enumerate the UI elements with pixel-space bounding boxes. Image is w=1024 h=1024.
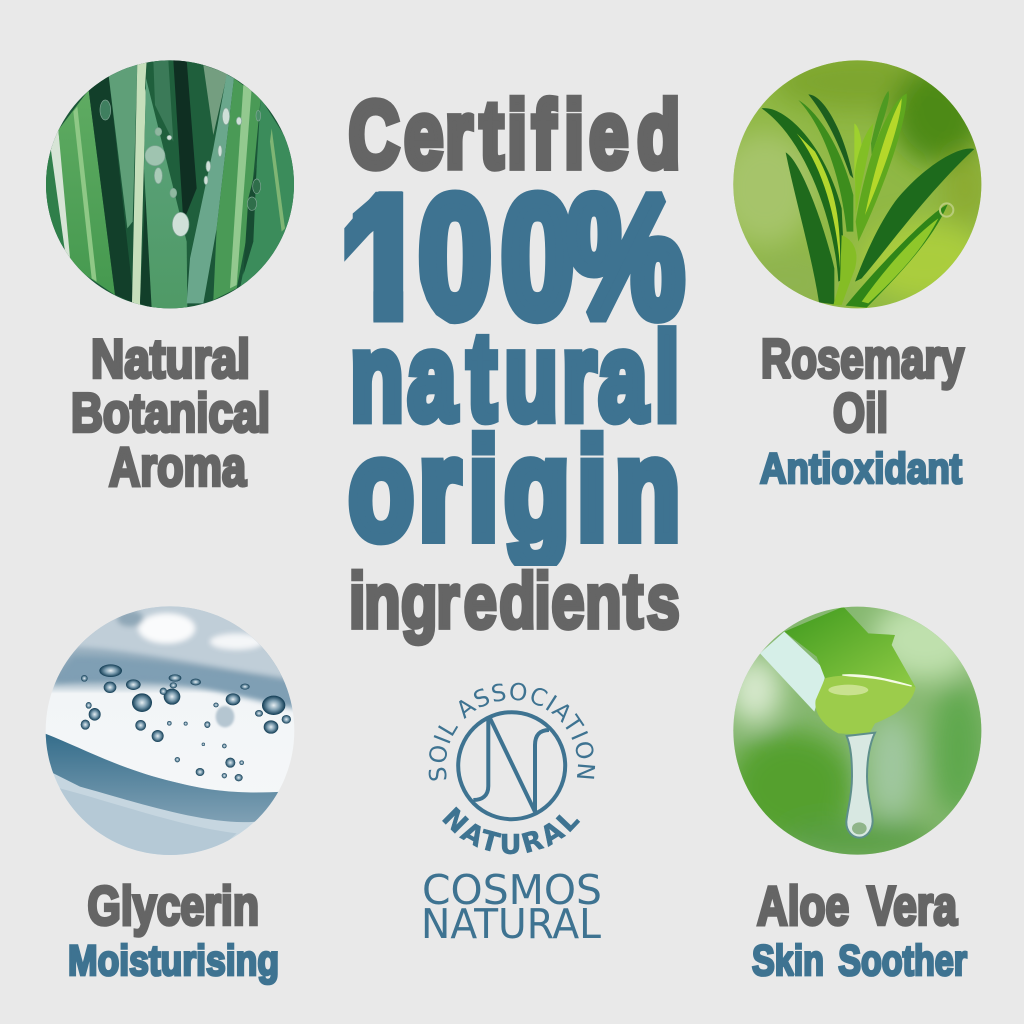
label: Natural Botanical Aroma [71,328,270,498]
logo text: COSMOS NATURAL: NATURAL [421,900,601,948]
benefit: Antioxidant [760,445,962,493]
ingredients: ingredients [349,557,680,645]
benefit: Moisturising [68,937,279,985]
leaves [786,152,834,304]
ingredient name: Aloe Vera [757,874,957,936]
photo: lemongrass blades with dew [40,55,300,315]
logo: Soil Association Natural seal [428,682,596,854]
label: Natural Botanical Aroma: Aroma [109,436,246,498]
arc text: NATURAL: NATURAL [442,806,580,854]
Certified: Certified [349,82,680,188]
bubbles [81,664,291,781]
arc text: SOIL ASSOCIATION: SOIL ASSOCIATION [428,682,596,780]
label: Rosemary Oil Antioxidant [760,328,964,493]
label: Natural Botanical Aroma: Natural [91,328,250,390]
photo: aloe vera leaf with gel drop [725,600,985,860]
heading: Certified 100% natural origin ingredients [335,82,684,645]
ring with N mark [458,712,565,819]
ingredient name: Glycerin [88,874,259,936]
origin: origin [349,409,680,569]
ingredient name [761,328,964,444]
ingredient name: Oil [833,382,888,444]
photo: rosemary sprig [733,60,982,308]
label: Aloe Vera Skin Soother [752,874,967,985]
benefit: Skin Soother [752,937,967,985]
logo text: COSMOS NATURAL [421,866,602,948]
natural: natural [350,309,679,446]
leaf [760,632,827,712]
logo text: COSMOS NATURAL: COSMOS [422,866,602,914]
label: Glycerin Moisturising [68,874,279,985]
photo: glycerin gel with bubbles [40,600,300,860]
label: Natural Botanical Aroma: Botanical [71,382,270,444]
water drops [100,100,261,236]
gel drop [846,733,875,838]
100%: 100% [349,163,684,353]
ingredient name: Rosemary [761,328,964,390]
